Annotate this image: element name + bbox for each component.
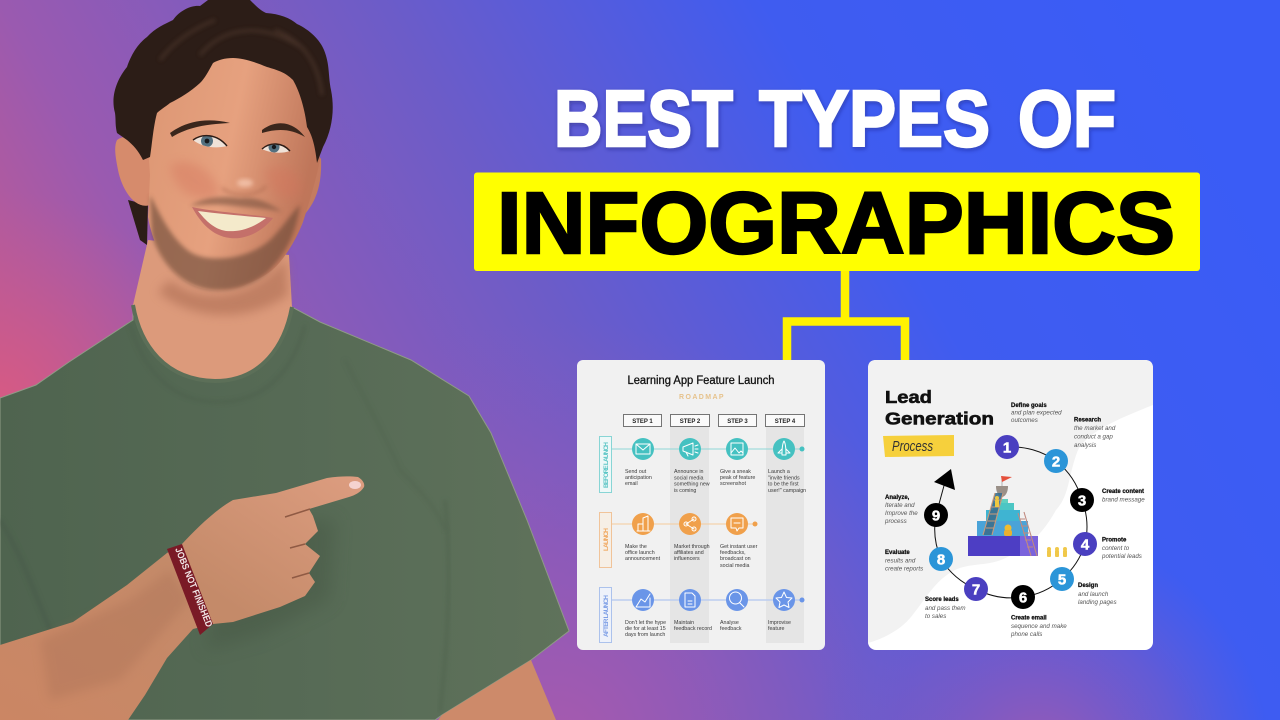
- person pointing at the title: [0, 0, 569, 720]
- row: after launch: feedback record: [674, 626, 712, 632]
- step circles: 9: [932, 508, 940, 524]
- step labels: Iterate and: [885, 502, 915, 509]
- lead generation title: Generation: [885, 408, 994, 428]
- circular process path: [935, 447, 1087, 598]
- illustration: tower with ladders and trophy: [968, 476, 1067, 557]
- step circles: 3: [1078, 492, 1086, 510]
- step labels: Define goals: [1011, 403, 1047, 409]
- step circles: 7: [972, 582, 980, 598]
- row: after launch: AFTER LAUNCH: [603, 595, 610, 637]
- row: before launch: social media: [674, 476, 703, 482]
- heading: best types of: [554, 74, 1116, 163]
- connector lines: [787, 270, 905, 360]
- pointing forearm and hand: [0, 476, 364, 720]
- step labels: results and: [885, 558, 916, 564]
- cheek colour: [170, 162, 302, 199]
- row: launch: office launch: [625, 550, 655, 556]
- lead generation title: Lead: [885, 387, 932, 407]
- row: launch: LAUNCH: [603, 528, 610, 551]
- row: before launch: Send out: [625, 469, 647, 475]
- row: before launch: peak of feature: [720, 475, 755, 481]
- hair highlights: [160, 20, 322, 95]
- step labels: landing pages: [1078, 599, 1117, 606]
- icon: picture: [731, 443, 743, 455]
- row: launch: Make the: [625, 544, 647, 550]
- step labels: the market and: [1074, 425, 1116, 432]
- step labels: and pass them: [925, 605, 966, 612]
- step labels: Design: [1078, 583, 1098, 589]
- neck and collar: [130, 240, 305, 402]
- row: launch: announcement: [625, 556, 661, 562]
- right ear: [304, 158, 321, 215]
- row: launch: broadcast on: [720, 556, 751, 562]
- step headers: STEP 2: [680, 419, 701, 425]
- row: before launch: Give a sneak: [720, 469, 751, 475]
- left eye: [193, 135, 227, 147]
- ear: [115, 137, 150, 206]
- nose: [222, 186, 266, 195]
- step labels: and plan expected: [1011, 410, 1062, 416]
- step labels: sequence and make: [1011, 623, 1067, 630]
- row: after launch: feedback: [720, 626, 742, 632]
- process tag: [883, 435, 954, 457]
- heading: best types of: TYPES: [759, 74, 990, 163]
- yellow title banner: [474, 172, 1200, 272]
- row: before launch: email: [625, 481, 638, 487]
- right arm: [438, 660, 556, 720]
- moustache shadow: [190, 197, 282, 212]
- row: before launch: to be the first: [768, 482, 799, 488]
- icon: speech bubble: [731, 518, 743, 531]
- step labels: process: [884, 518, 907, 525]
- row: after launch: feature: [768, 626, 785, 632]
- step circles: 8: [937, 552, 945, 568]
- row: launch: social media: [720, 563, 749, 569]
- heading: best types of: BEST: [554, 74, 733, 163]
- icon: megaphone: [683, 443, 698, 456]
- step labels: Score leads: [925, 597, 959, 603]
- row: launch: affiliates and: [674, 550, 704, 556]
- icon: share: [684, 517, 696, 531]
- step labels: brand message: [1102, 496, 1145, 504]
- step labels: Research: [1074, 418, 1101, 424]
- icon: buildings: [637, 516, 650, 531]
- lead generation title: [885, 387, 994, 428]
- right eyebrow: [262, 123, 305, 137]
- left eyebrow: [170, 120, 230, 137]
- stubble beard: [150, 195, 300, 290]
- row: before launch: Launch a: [768, 469, 790, 475]
- grey column highlights: [670, 427, 804, 643]
- arrow head: [934, 469, 955, 490]
- row: after launch: [600, 588, 804, 642]
- step circles: 5: [1058, 572, 1066, 588]
- row: launch: Market through: [674, 544, 710, 550]
- step labels: Create email: [1011, 616, 1047, 622]
- row: before launch: screenshot: [720, 481, 746, 487]
- step labels: Create content: [1102, 489, 1144, 495]
- wristband: JOBS NOT FINISHED: [172, 546, 214, 629]
- icon: magnifier: [730, 592, 744, 607]
- heading: infographics: INFOGRAPHICS: [497, 175, 1175, 272]
- step circles: 2: [1052, 454, 1060, 470]
- step labels: content to: [1102, 545, 1130, 552]
- row: before launch: [600, 436, 806, 494]
- step labels: create reports: [885, 566, 923, 572]
- row: after launch: days from launch: [625, 632, 665, 638]
- heading: best types of: OF: [1018, 74, 1116, 163]
- row: launch: Get instant user: [720, 544, 758, 550]
- step circles: 6: [1019, 590, 1027, 606]
- panel: lead generation infographic: [868, 360, 1153, 650]
- step labels: conduct a gap: [1074, 434, 1113, 440]
- step labels: analysis: [1074, 442, 1096, 449]
- step circles: 1: [1003, 440, 1011, 456]
- face: [147, 50, 320, 291]
- row: after launch: die for at least 15: [625, 626, 666, 632]
- step labels: and launch: [1078, 591, 1109, 598]
- icon: star: [776, 592, 792, 608]
- roadmap title: Learning App Feature Launch: [628, 375, 774, 387]
- row: before launch: something new: [674, 482, 710, 488]
- icon: rocket: [778, 441, 790, 455]
- step headers: STEP 4: [775, 419, 796, 425]
- row: before launch: "invite friends: [768, 476, 800, 482]
- step labels: outcomes: [1011, 417, 1038, 424]
- row: launch: [600, 512, 758, 569]
- roadmap subtitle: ROADMAP: [679, 394, 725, 401]
- row: before launch: user!" campaign: [768, 488, 806, 494]
- step labels: Evaluate: [885, 550, 910, 556]
- hair: [113, 0, 333, 163]
- row: after launch: Analyse: [720, 620, 739, 626]
- step headers: [624, 414, 804, 426]
- row: before launch: is coming: [674, 488, 696, 494]
- row: launch: feedbacks,: [720, 550, 746, 556]
- panel: roadmap infographic: [577, 360, 825, 650]
- icon: document: [685, 593, 695, 607]
- step headers: STEP 1: [632, 419, 653, 425]
- shirt: [0, 305, 569, 720]
- step labels: Improve the: [885, 510, 918, 517]
- row: after launch: Don't let the hype: [625, 620, 666, 626]
- icon: chart: [636, 594, 650, 607]
- step circles: 4: [1081, 536, 1090, 554]
- row: before launch: BEFORE LAUNCH: [603, 442, 610, 488]
- smile: [192, 207, 273, 238]
- step labels: potential leads: [1101, 553, 1142, 560]
- step labels: to sales: [925, 613, 946, 620]
- strand of hair behind the ear: [128, 200, 148, 245]
- grey background blob: [868, 360, 1153, 643]
- step headers: STEP 3: [727, 419, 748, 425]
- row: launch: influencers: [674, 556, 700, 562]
- row: before launch: anticipation: [625, 475, 652, 481]
- step labels: phone calls: [1010, 631, 1042, 638]
- row: after launch: Maintain: [674, 620, 694, 626]
- row: before launch: Announce in: [674, 469, 704, 475]
- step labels: [884, 403, 1145, 638]
- row: after launch: Improvise: [768, 620, 791, 626]
- step labels: Analyze,: [885, 495, 910, 501]
- step circles: [924, 435, 1097, 609]
- step labels: Promote: [1102, 538, 1127, 544]
- right eye: [262, 142, 290, 153]
- icon: envelope: [636, 444, 650, 454]
- process tag: Process: [892, 438, 933, 455]
